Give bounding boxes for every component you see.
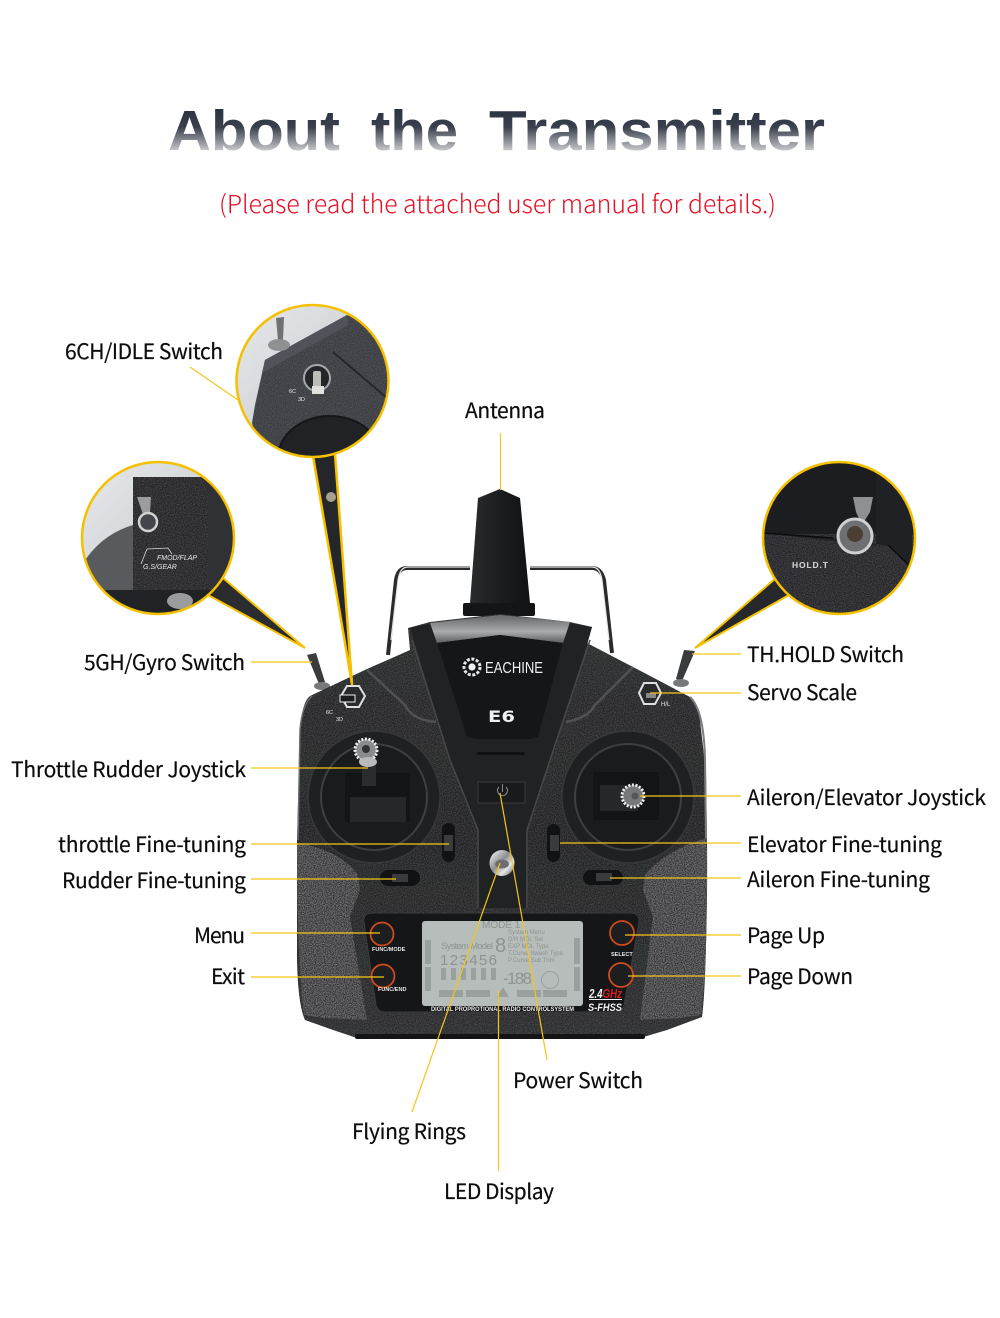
label: Throttle Rudder Joystick: Throttle Rudder Joystick bbox=[11, 754, 246, 784]
lens rim bbox=[82, 462, 234, 614]
centre spine bbox=[410, 615, 592, 908]
label: Elevator Fine-tuning: Elevator Fine-tuning bbox=[747, 829, 942, 859]
label: 6CH/IDLE Switch: 6CH/IDLE Switch bbox=[65, 336, 223, 366]
LCD display: System Menu bbox=[508, 930, 545, 936]
frequency badge: S-FHSS bbox=[588, 1002, 623, 1014]
magnifier lens: 3D bbox=[298, 397, 305, 403]
label: Flying Rings bbox=[352, 863, 500, 1146]
model name: E6 bbox=[488, 707, 515, 726]
label: Antenna bbox=[465, 395, 545, 490]
foot shadow bbox=[355, 1034, 645, 1039]
body shell bbox=[297, 614, 707, 1038]
body switches: 3D bbox=[336, 717, 343, 723]
label: Menu: Menu bbox=[194, 920, 245, 950]
frequency badge: 2.4GHz bbox=[588, 986, 622, 1001]
label: Servo Scale: Servo Scale bbox=[747, 677, 857, 707]
panel small print: SELECT bbox=[611, 952, 633, 958]
button: menu bbox=[370, 922, 394, 946]
title: Transmitter bbox=[489, 99, 825, 163]
LCD display: D/R MDL Sel bbox=[508, 937, 543, 943]
magnifier lens: FMOD/FLAP bbox=[157, 555, 197, 562]
label: Aileron Fine-tuning: Aileron Fine-tuning bbox=[747, 864, 930, 894]
magnifier lens bbox=[763, 462, 917, 616]
label: TH.HOLD Switch: TH.HOLD Switch bbox=[747, 639, 904, 669]
speaker grille right bbox=[640, 838, 707, 1020]
panel small print bbox=[372, 947, 633, 1013]
callout: 6CH/IDLE switch magnifier bbox=[236, 305, 390, 684]
antenna bbox=[463, 489, 535, 616]
spine edges bbox=[412, 640, 590, 908]
LCD display: 123456 bbox=[440, 952, 497, 969]
title bbox=[168, 99, 825, 163]
title: the bbox=[371, 99, 458, 163]
frequency badge bbox=[588, 986, 623, 1014]
button: page down bbox=[609, 963, 633, 987]
label: Aileron/Elevator Joystick: Aileron/Elevator Joystick bbox=[747, 782, 986, 812]
panel small print: FUNC/END bbox=[378, 987, 406, 993]
magnifier tail bbox=[695, 578, 789, 648]
gloss strip bbox=[430, 615, 570, 643]
LCD display: -188 bbox=[503, 969, 532, 988]
speaker grille left bbox=[297, 843, 367, 1020]
magnifier lens: G.S/GEAR bbox=[143, 564, 177, 571]
label: Exit: Exit bbox=[211, 961, 245, 991]
button: exit bbox=[372, 964, 394, 988]
label: Antenna: Antenna bbox=[465, 395, 545, 425]
carry handle bbox=[388, 567, 612, 655]
icon: Eachine gear bbox=[464, 659, 480, 675]
right gimbal bbox=[562, 731, 694, 863]
shoulder ridges bbox=[298, 667, 706, 840]
magnifier lens: HOLD.T bbox=[792, 560, 829, 570]
callout: TH.HOLD switch magnifier bbox=[695, 462, 917, 648]
brand name: EACHINE bbox=[485, 660, 543, 677]
subtitle: (Please read the attached user manual for details.) bbox=[219, 185, 776, 221]
label: 6CH/IDLE Switch bbox=[65, 336, 238, 400]
toggle switches on shoulders bbox=[307, 650, 695, 690]
label: LED Display: LED Display bbox=[444, 1176, 554, 1206]
magnifier tail bbox=[208, 578, 305, 648]
LCD display bbox=[422, 920, 583, 1006]
callout: 5GH/Gyro switch magnifier bbox=[82, 462, 305, 648]
power switch bbox=[478, 782, 525, 803]
label: throttle Fine-tuning: throttle Fine-tuning bbox=[58, 829, 246, 859]
flying rings bbox=[490, 850, 514, 876]
body switches: H/L bbox=[661, 702, 671, 708]
body switches bbox=[326, 683, 671, 723]
right stick knob bbox=[622, 785, 644, 807]
magnifier lens bbox=[82, 462, 236, 616]
label: Power Switch bbox=[500, 793, 643, 1095]
label: Page Down: Page Down bbox=[747, 961, 853, 991]
label: Flying Rings: Flying Rings bbox=[352, 1116, 466, 1146]
LCD display: P.Curve Sub Trim bbox=[508, 958, 555, 964]
LCD display: EXP MDL Type bbox=[508, 944, 549, 950]
left stick knob bbox=[355, 739, 377, 767]
LCD display: 8 bbox=[495, 935, 506, 957]
button: page up bbox=[610, 921, 634, 945]
magnifier lens bbox=[238, 306, 388, 456]
logo panel bbox=[437, 635, 563, 739]
lens rim bbox=[236, 305, 388, 457]
panel small print: FUNC/MODE bbox=[372, 947, 406, 953]
LCD display: T.Curve Swash Type bbox=[508, 951, 564, 957]
magnifier lens: 6C bbox=[289, 389, 296, 395]
trim sliders bbox=[380, 823, 623, 886]
LCD display: System Model bbox=[441, 941, 493, 952]
title: About bbox=[168, 99, 340, 163]
lens rim bbox=[763, 462, 915, 614]
label: Power Switch: Power Switch bbox=[513, 1065, 643, 1095]
control panel bbox=[364, 913, 639, 1014]
left gimbal bbox=[308, 731, 440, 863]
magnifier tail bbox=[313, 454, 352, 684]
speaker slit bbox=[477, 752, 525, 755]
label: Rudder Fine-tuning: Rudder Fine-tuning bbox=[62, 865, 246, 895]
body switches: 6C bbox=[326, 710, 333, 716]
label: 5GH/Gyro Switch: 5GH/Gyro Switch bbox=[84, 647, 245, 677]
panel small print: DIGITAL PROPROTIONAL RADIO CONTROLSYSTEM bbox=[431, 1007, 574, 1013]
label: Page Up: Page Up bbox=[747, 920, 825, 950]
transmitter bbox=[297, 489, 707, 1039]
LCD display: MODE 1 bbox=[482, 920, 521, 931]
